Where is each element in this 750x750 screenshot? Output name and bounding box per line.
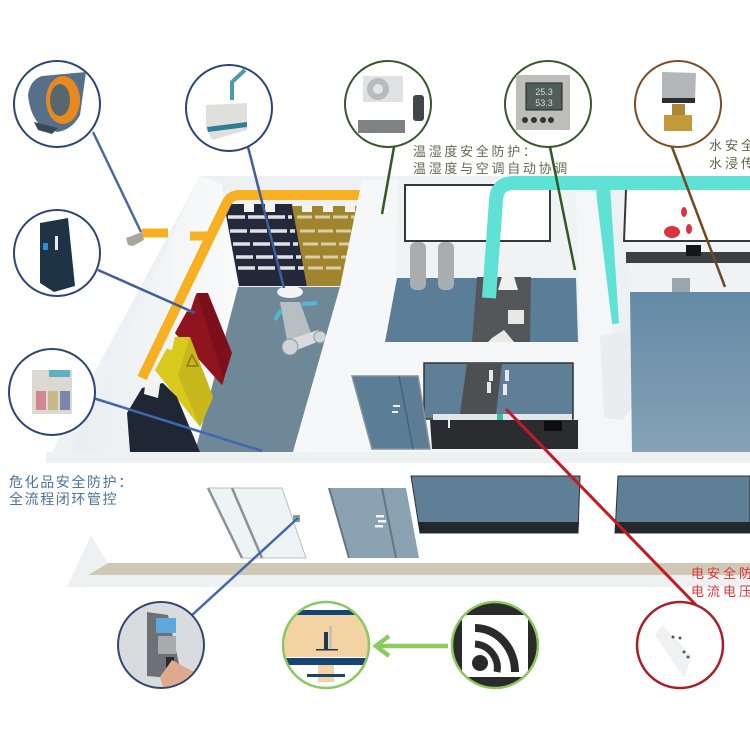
gas cylinders: [410, 242, 454, 290]
text: temperature and humidity safety: 温湿度与空调自动协调: [413, 161, 570, 176]
icon: fan circle: [14, 61, 100, 147]
arrow: data to monitor: [376, 636, 448, 656]
connector line: fingerprint: [191, 518, 298, 616]
yellow exhaust pipe: [142, 195, 365, 378]
wall gas outlet: [126, 232, 144, 246]
icon: fingerprint reader circle: [118, 602, 204, 690]
white exhaust stacks: [144, 290, 196, 398]
text: water safety: [709, 138, 750, 171]
red cabinet: [175, 293, 232, 385]
icon: robot arm circle: [186, 65, 272, 151]
wall between rooms 1 and 2: [293, 180, 405, 452]
room 2 floor: [385, 278, 578, 342]
baseboard edge: [67, 535, 750, 587]
icon: wireless signal circle: [452, 602, 538, 688]
robot in room 1: [275, 286, 326, 355]
connector line: valve: [672, 147, 725, 287]
front wall of room 2: [305, 342, 590, 452]
connector line: fan: [93, 132, 141, 232]
text: hazardous chemicals safety: [9, 474, 134, 507]
icon: gas control panel circle: [9, 349, 95, 435]
exterior window right: [615, 476, 750, 533]
icon: monitor circle: [282, 602, 370, 688]
icon: dark cabinet circle: [14, 210, 100, 296]
icon: water valve circle: [635, 61, 721, 147]
yellow cabinet: [155, 337, 213, 427]
cyan duct: [489, 183, 750, 324]
glass door room 2: [352, 376, 430, 449]
room 1 floor: [195, 287, 340, 452]
text: temperature and humidity safety: [413, 144, 570, 176]
icon: temperature humidity meter circle: [505, 61, 591, 147]
connector line: gas panel: [93, 398, 262, 451]
connector line: robot: [247, 143, 284, 288]
text: temperature and humidity safety: 温湿度安全防护：: [413, 144, 539, 159]
panel: building upper floor plan: [46, 176, 750, 463]
front window room 2: [424, 363, 573, 420]
room 3 counter: [626, 245, 750, 292]
front ledge: [46, 452, 750, 463]
red fire sprinkler cluster: [664, 207, 692, 238]
exterior glass door: [329, 488, 419, 558]
dark cabinet: [127, 383, 200, 452]
room 2 back wall and window: [395, 180, 578, 278]
text: hazardous chemicals safety: 全流程闭环管控: [9, 491, 118, 507]
lab bench room 2: [472, 270, 531, 342]
exterior window left: [411, 476, 580, 533]
icon: temperature humidity meter circle: 53.3: [535, 98, 553, 108]
connector line: cabinet: [98, 270, 195, 313]
room 3 window: [624, 190, 750, 241]
icon: air conditioner circle: [345, 61, 431, 147]
icon: temperature humidity meter circle: 25.3: [535, 87, 553, 97]
room 1 back wall and shelves: [222, 184, 365, 287]
connector line: AC: [382, 147, 394, 214]
text: hazardous chemicals safety: 危化品安全防护：: [9, 474, 134, 490]
tan baseboard: [88, 563, 750, 575]
text: electrical safety: [691, 566, 750, 599]
wall between rooms 2 and 3: [576, 192, 636, 452]
room 3 floor: [630, 292, 750, 452]
panel: lower exterior wall: [67, 476, 750, 587]
exterior white door: [208, 488, 306, 558]
icon: smart socket circle: [637, 602, 723, 688]
connector line: sensor: [550, 147, 575, 270]
counter under window: [430, 414, 578, 449]
connector line: socket: [506, 409, 697, 606]
